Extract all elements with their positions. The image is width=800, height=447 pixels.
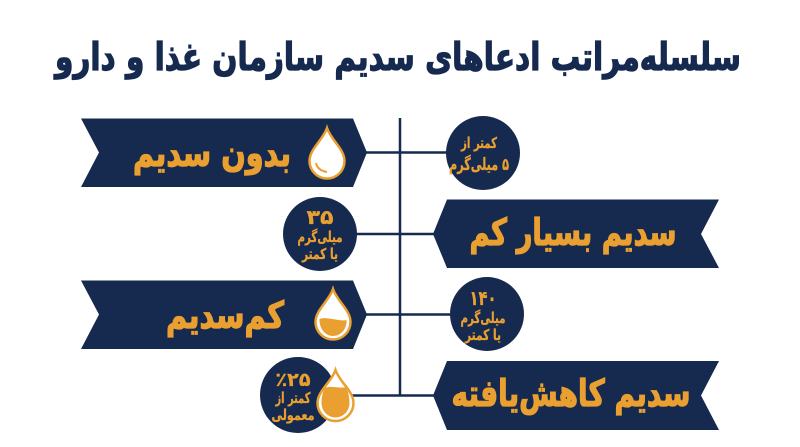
callout: 35 mg or less: ۳۵ bbox=[306, 205, 334, 229]
callout: 35 mg or less: یا کمتر bbox=[301, 245, 338, 263]
callout: less than 5 mg bbox=[446, 116, 520, 190]
callout: 140 mg or less bbox=[450, 277, 524, 351]
heading: very low sodium: سدیم بسیار کم bbox=[470, 211, 676, 254]
timeline connector bbox=[320, 118, 487, 396]
panel: no sodium bbox=[81, 118, 367, 187]
callout: 140 mg or less: یا کمتر bbox=[464, 326, 501, 344]
callout: less than 5 mg: کمتر از bbox=[460, 134, 497, 152]
ribbon bbox=[433, 361, 719, 430]
panel: low sodium bbox=[81, 280, 367, 349]
icon: half drop bbox=[316, 289, 350, 340]
icon: mostly full drop bbox=[318, 370, 354, 421]
callout: 25 percent less than usual: معمولی bbox=[272, 406, 314, 424]
heading: low sodium: کم‌سدیم bbox=[166, 294, 284, 337]
callout: 25 percent less than usual: کمتر از bbox=[275, 389, 311, 407]
callout: 35 mg or less: میلی‌گرم bbox=[298, 228, 342, 246]
callout: 35 mg or less bbox=[283, 197, 357, 271]
callout: 25 percent less than usual: ٪۲۵ bbox=[276, 369, 311, 391]
callout: 140 mg or less: ۱۴۰ bbox=[470, 286, 496, 310]
ribbon bbox=[433, 200, 719, 268]
icon: empty drop bbox=[310, 128, 344, 178]
panel: reduced sodium bbox=[433, 361, 719, 430]
callout: 25 percent less than usual bbox=[260, 357, 336, 433]
callout: 140 mg or less: میلی‌گرم bbox=[460, 309, 506, 327]
ribbon bbox=[81, 118, 367, 187]
heading: no sodium: بدون سدیم bbox=[133, 132, 291, 175]
ribbon bbox=[81, 280, 367, 349]
heading: reduced sodium: سدیم کاهش‌یافته bbox=[452, 372, 690, 415]
panel: very low sodium bbox=[433, 200, 719, 268]
callout: less than 5 mg: ۵ میلی‌گرم bbox=[449, 154, 509, 175]
